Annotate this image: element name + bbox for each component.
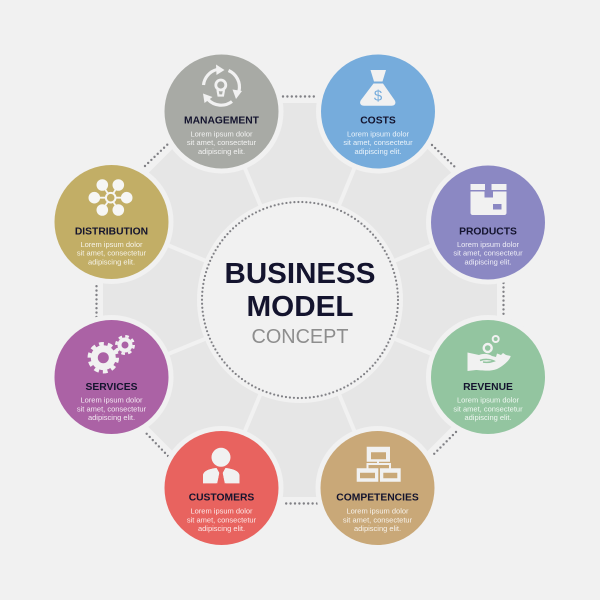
central circle (197, 197, 403, 403)
description: sit amet, consectetur (453, 249, 523, 258)
label: DISTRIBUTION (75, 226, 148, 237)
description: adipiscing elit. (464, 257, 512, 266)
description: sit amet, consectetur (77, 404, 147, 413)
label: COMPETENCIES (336, 493, 419, 504)
icon: gears (89, 336, 134, 372)
description: adipiscing elit. (198, 147, 245, 156)
panel: management (160, 50, 284, 174)
description: Lorem ipsum dolor (346, 507, 409, 516)
subtitle: CONCEPT (252, 326, 348, 348)
description: adipiscing elit. (354, 147, 402, 156)
description: sit amet, consectetur (77, 249, 147, 258)
icon: organisation chart (357, 447, 401, 482)
label: SERVICES (86, 382, 138, 393)
description: Lorem ipsum dolor (457, 240, 520, 249)
panel: costs (316, 50, 440, 174)
panel: products (426, 160, 550, 284)
description: Lorem ipsum dolor (190, 130, 253, 138)
description: sit amet, consectetur (343, 515, 413, 524)
title line two: MODEL (246, 291, 354, 323)
description: adipiscing elit. (464, 413, 512, 422)
description: Lorem ipsum dolor (80, 240, 143, 249)
icon: cycle with light bulb (203, 64, 242, 105)
description: sit amet, consectetur (453, 404, 523, 413)
description: adipiscing elit. (354, 524, 401, 533)
description: Lorem ipsum dolor (190, 507, 253, 516)
description: sit amet, consectetur (187, 515, 257, 524)
icon: person with tie (203, 448, 240, 483)
description: adipiscing elit. (88, 257, 135, 266)
icon: hand with coins (468, 336, 511, 371)
description: adipiscing elit. (88, 413, 135, 422)
spokes (112, 111, 488, 488)
dotted octagon connectors (96, 96, 504, 504)
icon: network hub (88, 179, 132, 216)
panel: customers (160, 426, 284, 550)
label: PRODUCTS (459, 226, 517, 237)
label: REVENUE (463, 382, 513, 393)
octagon background (103, 103, 497, 497)
description: sit amet, consectetur (187, 138, 257, 147)
label: MANAGEMENT (184, 116, 260, 126)
panel: revenue (426, 315, 550, 439)
icon: box (470, 184, 506, 215)
panel: services (50, 315, 174, 439)
panel: distribution (50, 160, 174, 284)
description: Lorem ipsum dolor (457, 396, 520, 405)
description: Lorem ipsum dolor (80, 396, 143, 405)
label: CUSTOMERS (189, 493, 254, 504)
title: BUSINESS (224, 258, 376, 290)
description: sit amet, consectetur (343, 138, 413, 147)
panel: competencies (316, 426, 440, 550)
label: COSTS (360, 116, 396, 126)
description: adipiscing elit. (198, 524, 245, 533)
description: Lorem ipsum dolor (347, 130, 410, 138)
icon: money bag: $ (374, 88, 383, 104)
